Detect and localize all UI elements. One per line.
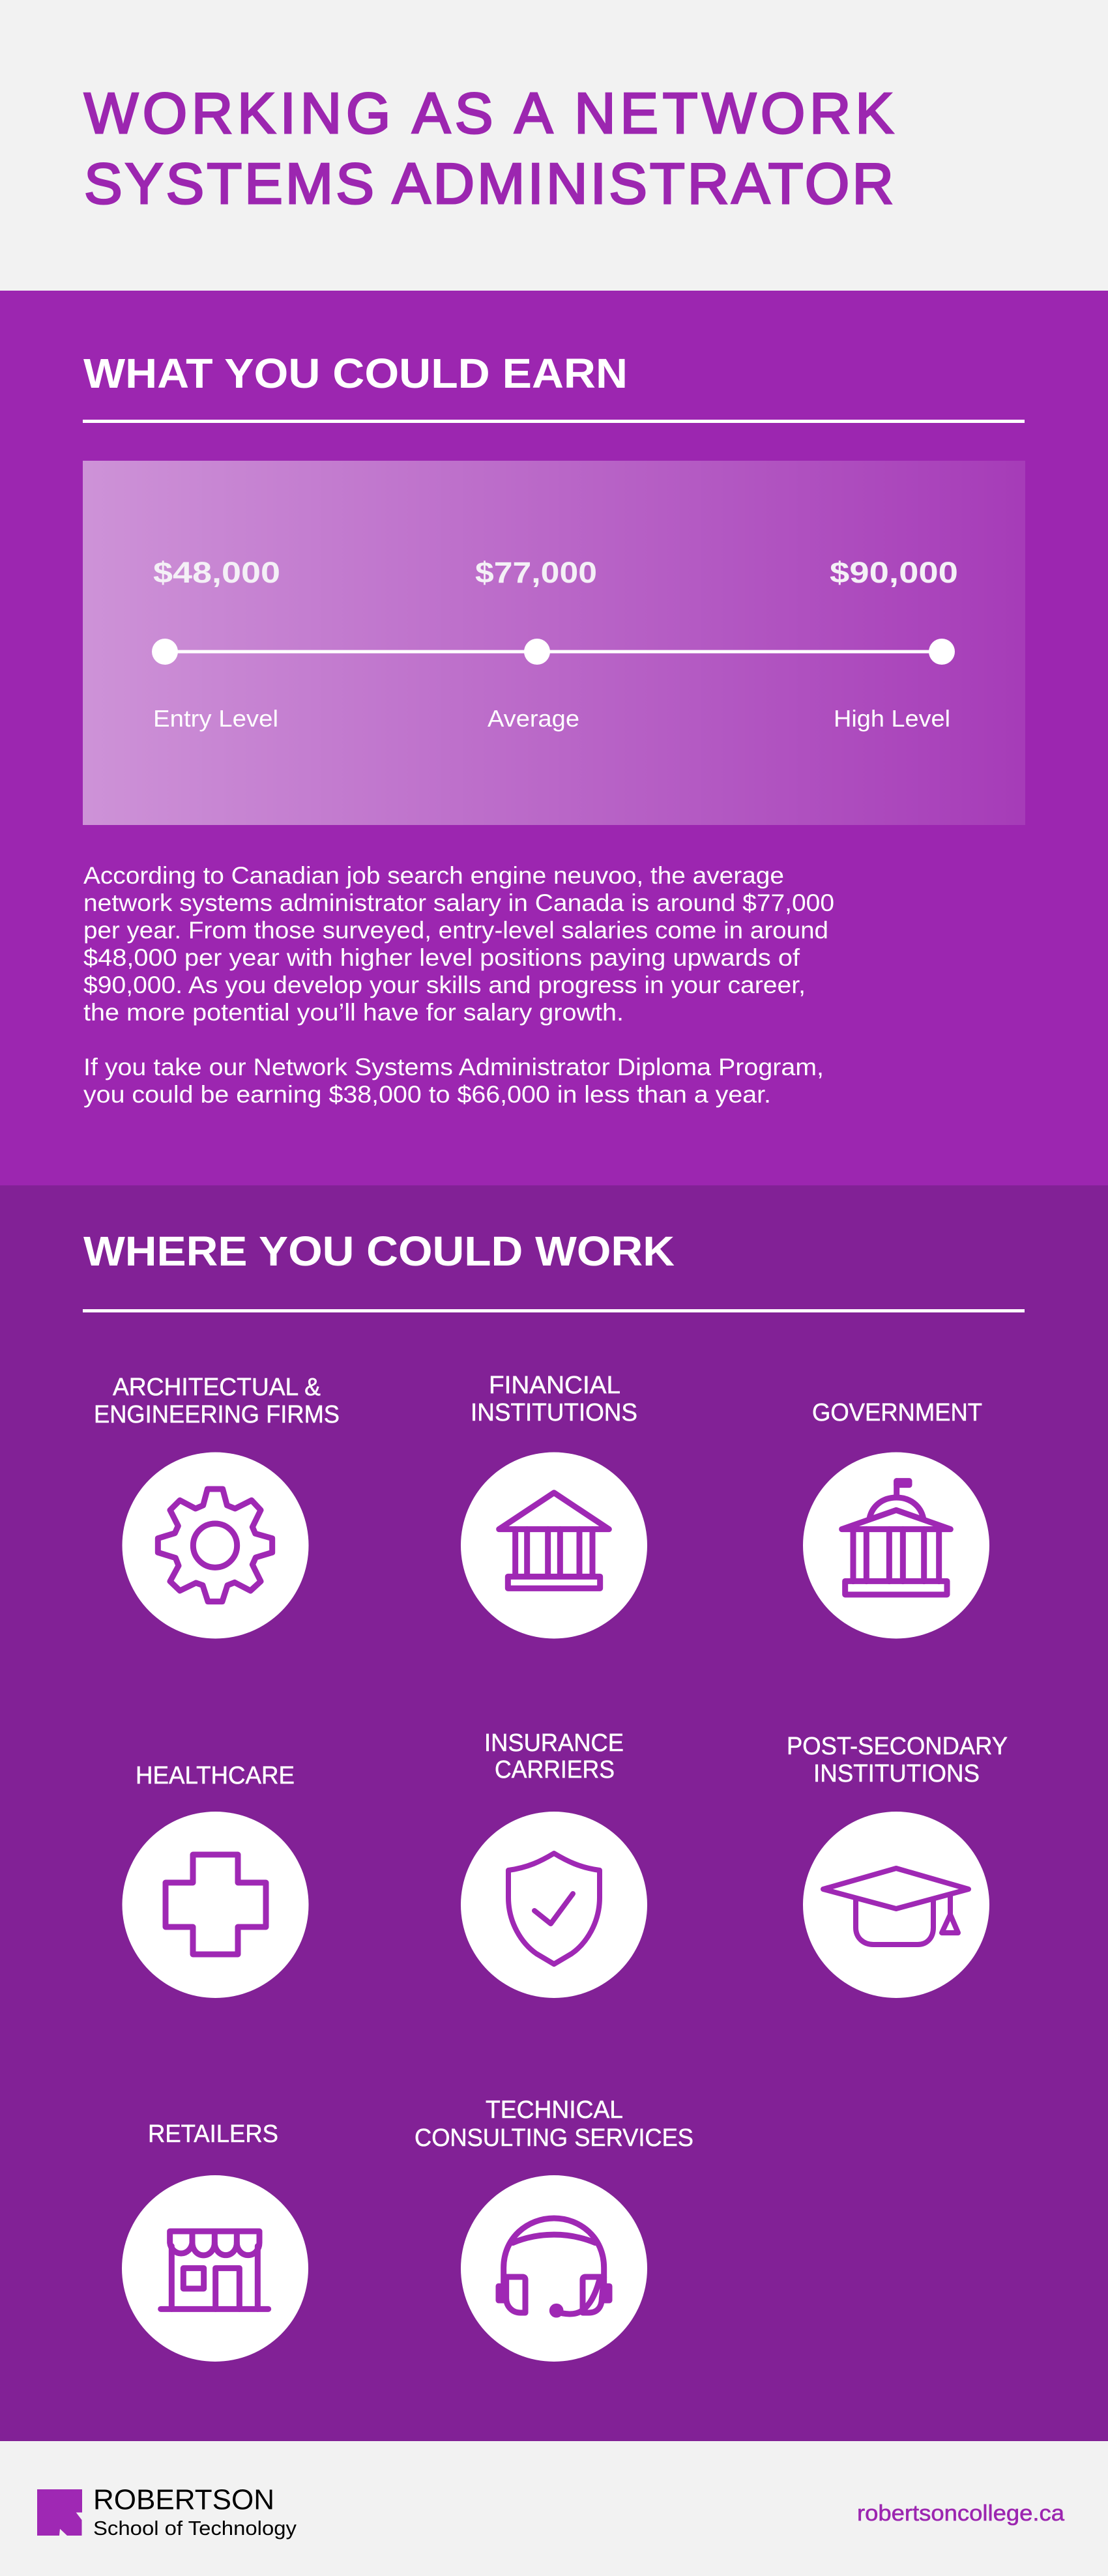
label: post-secondary institutions: POST-SECONDARY bbox=[787, 1733, 1008, 1760]
icon: headset bbox=[461, 2175, 647, 2362]
label: architectural and engineering firms bbox=[94, 1374, 340, 1428]
label: technical consulting services: TECHNICAL bbox=[486, 2096, 623, 2124]
heading: where you could work: WHERE YOU COULD WORK bbox=[83, 1228, 675, 1275]
salary level labels: High Level bbox=[834, 705, 950, 732]
icon: storefront bbox=[122, 2175, 308, 2362]
salary description text: per year. From those surveyed, entry-level salaries come in around bbox=[83, 917, 828, 944]
salary level labels bbox=[153, 705, 950, 732]
label: technical consulting services: CONSULTING SERVICES bbox=[415, 2124, 693, 2152]
logo wordmark: School of Technology bbox=[93, 2517, 297, 2540]
logo wordmark bbox=[93, 2484, 297, 2540]
icon: gear bbox=[123, 1452, 309, 1638]
salary description text: $90,000. As you develop your skills and progress in your career, bbox=[83, 972, 806, 998]
salary description text: $48,000 per year with higher level positions paying upwards of bbox=[83, 944, 800, 971]
label: healthcare: HEALTHCARE bbox=[136, 1762, 295, 1789]
title: SYSTEMS ADMINISTRATOR bbox=[84, 151, 894, 216]
label: post-secondary institutions: INSTITUTIONS bbox=[813, 1760, 980, 1787]
panel: where you could work bbox=[0, 1185, 1108, 2441]
label: technical consulting services bbox=[415, 2096, 693, 2152]
label: insurance carriers: CARRIERS bbox=[495, 1756, 615, 1784]
salary amounts: $48,000 bbox=[153, 556, 280, 589]
salary description text bbox=[83, 862, 834, 1108]
icon: graduation cap bbox=[803, 1812, 989, 1998]
label: architectural and engineering firms: ARCHITECTUAL & bbox=[113, 1374, 321, 1401]
label: retailers: RETAILERS bbox=[148, 2120, 278, 2148]
salary description text: you could be earning $38,000 to $66,000 in less than a year. bbox=[83, 1081, 771, 1108]
title bbox=[84, 81, 894, 216]
label: government: GOVERNMENT bbox=[812, 1399, 982, 1426]
logo wordmark: ROBERTSON bbox=[93, 2484, 274, 2515]
salary amounts: $77,000 bbox=[475, 556, 597, 589]
salary range panel bbox=[83, 461, 1025, 825]
salary description text: According to Canadian job search engine neuvoo, the average bbox=[83, 862, 784, 889]
salary description text: the more potential you’ll have for salary growth. bbox=[83, 999, 624, 1026]
salary timeline bbox=[152, 639, 955, 665]
label: financial institutions: INSTITUTIONS bbox=[471, 1399, 637, 1426]
website url: robertsoncollege.ca bbox=[857, 2501, 1064, 2526]
label: post-secondary institutions bbox=[787, 1733, 1008, 1787]
salary level labels: Entry Level bbox=[153, 705, 278, 732]
footer bbox=[37, 2484, 1064, 2540]
icon: bank bbox=[461, 1452, 647, 1638]
icon: medical cross bbox=[123, 1812, 309, 1998]
icon: shield bbox=[461, 1812, 647, 1998]
salary level labels: Average bbox=[488, 705, 579, 732]
salary description text: network systems administrator salary in Canada is around $77,000 bbox=[83, 890, 834, 916]
label: financial institutions: FINANCIAL bbox=[489, 1372, 620, 1399]
salary description text: If you take our Network Systems Administrator Diploma Program, bbox=[83, 1054, 824, 1080]
label: architectural and engineering firms: ENGINEERING FIRMS bbox=[94, 1401, 340, 1428]
label: insurance carriers: INSURANCE bbox=[484, 1729, 624, 1757]
icon: government building bbox=[803, 1452, 989, 1638]
label: financial institutions bbox=[471, 1372, 637, 1426]
logo mark bbox=[37, 2489, 82, 2536]
panel: what you could earn bbox=[0, 291, 1108, 1185]
title: WORKING AS A NETWORK bbox=[84, 81, 894, 145]
salary amounts bbox=[153, 556, 958, 589]
label: insurance carriers bbox=[484, 1729, 624, 1784]
salary amounts: $90,000 bbox=[830, 556, 958, 589]
heading: what you could earn: WHAT YOU COULD EARN bbox=[83, 350, 628, 397]
